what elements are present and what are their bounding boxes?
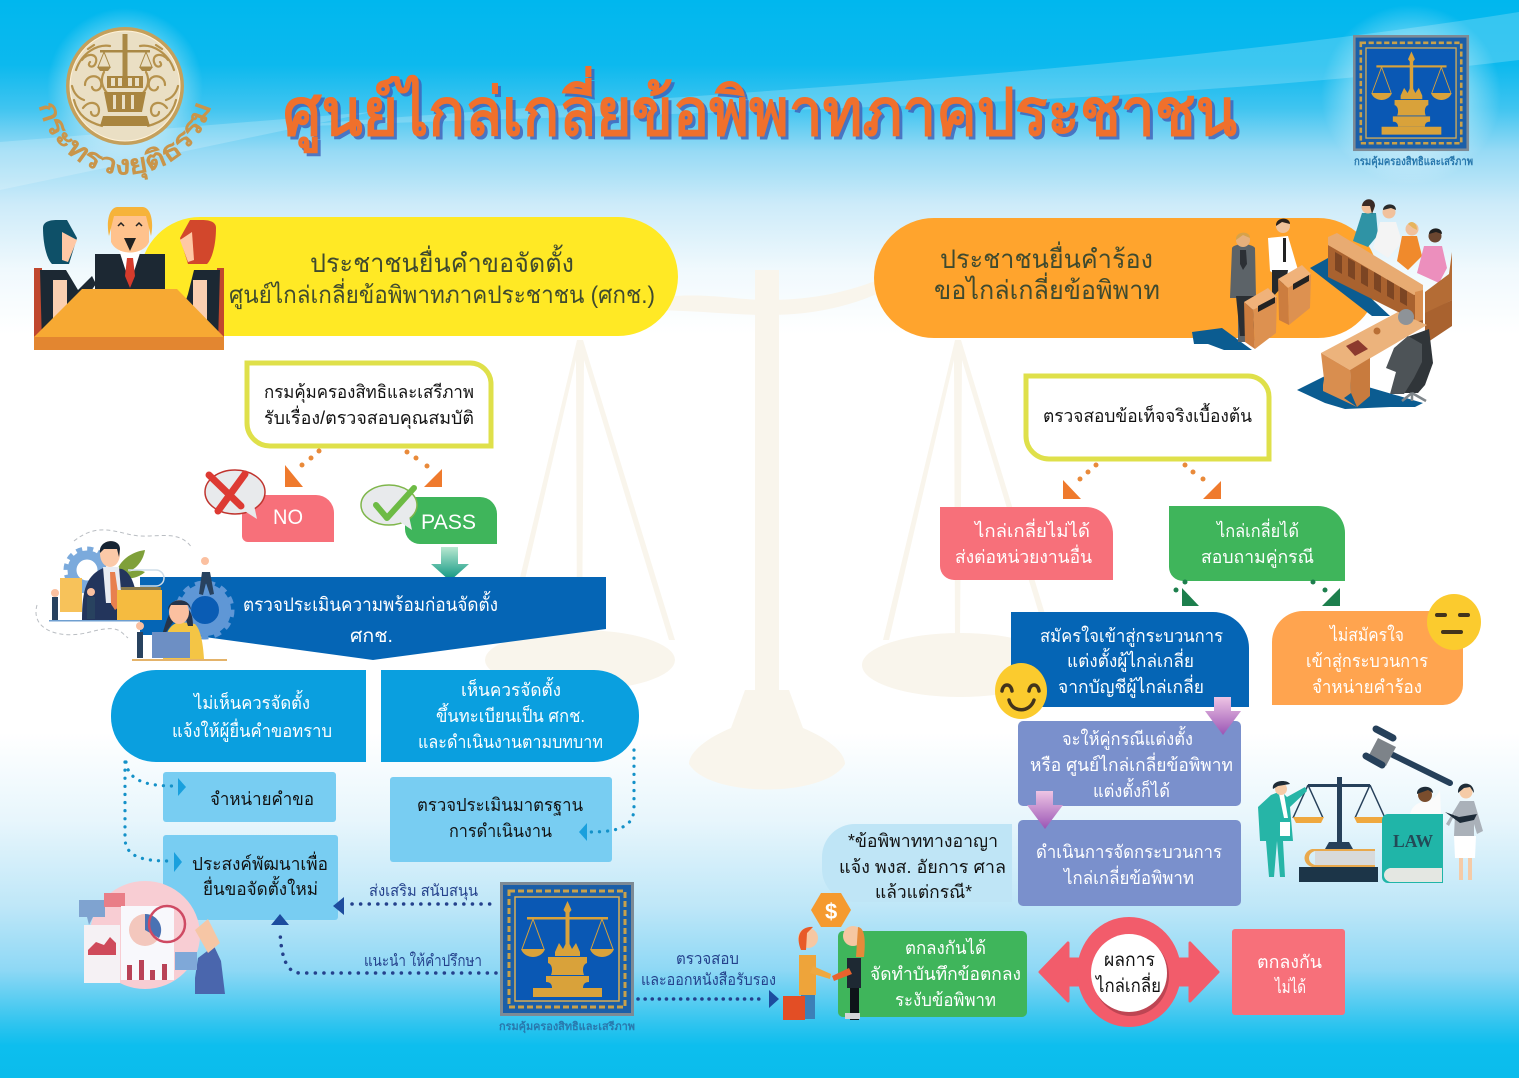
panel: orange heading: [874, 218, 1378, 338]
podiums: [1278, 265, 1311, 288]
arrow: advise and consult: [271, 914, 496, 973]
arrow: dotted links from left panel: [125, 762, 174, 861]
panel: appropriate to establish: และดำเนินงานตามบทบาท: [418, 732, 603, 752]
panel: PASS: PASS: [421, 511, 476, 534]
panel: yellow heading: [140, 217, 678, 336]
icon: handshake with dollar hexagon: $: [825, 899, 837, 924]
icon: data analysis report: [79, 881, 225, 994]
panel: orange heading: ขอไกล่เกลี่ยข้อพิพาท: [934, 272, 1160, 305]
lawyer left: [1230, 244, 1256, 342]
scales: [1308, 777, 1370, 845]
panel: agreement reached: ระงับข้อพิพาท: [895, 990, 996, 1010]
arrow: inspect and certify: ตรวจสอบ: [676, 951, 739, 968]
panel: wish to develop and reapply: ประสงค์พัฒนาเพื่อ: [192, 851, 328, 874]
icon: neutral face: [1427, 594, 1481, 650]
panel: parties or centre appoint: [1018, 721, 1241, 806]
middle person: [1410, 790, 1441, 814]
arrow: promote and support: ส่งเสริม สนับสนุน: [369, 883, 478, 901]
logo: department emblem, bottom: กรมคุ้มครองสิทธิและเสรีภาพ: [499, 1020, 635, 1034]
panel: voluntary process: แต่งตั้งผู้ไกล่เกลี่ย: [1067, 648, 1194, 672]
panel: readiness assessment banner: ตรวจประเมินความพร้อมก่อนจัดตั้ง: [243, 591, 498, 616]
panel: wish to develop and reapply: ยื่นขอจัดตั้งใหม่: [203, 876, 318, 899]
icon: law and justice group: LAW: [1393, 831, 1433, 851]
panel: can mediate: ไกล่เกลี่ยได้: [1215, 518, 1299, 541]
panel: orange heading: ประชาชนยื่นคำร้อง: [940, 241, 1153, 274]
panel: standards assessment: [390, 777, 612, 862]
icon: office workers with gears: [36, 530, 232, 661]
law book: [1382, 814, 1443, 883]
panel: cannot mediate: ไกล่เกลี่ยไม่ได้: [973, 518, 1090, 541]
judge's desk: [1321, 312, 1427, 370]
panel: can mediate: สอบถามคู่กรณี: [1201, 547, 1314, 568]
watermark: scales of justice: [485, 270, 1058, 790]
arrow: fact check to can mediate: [1182, 462, 1221, 499]
panel: not voluntary: จำหน่ายคำร้อง: [1312, 677, 1422, 697]
arrow: purple down to mediation: [1027, 791, 1063, 829]
stacked books: [1304, 849, 1375, 867]
curved ministry name: กระทรวงยุติธรรม: [38, 102, 211, 180]
jury members: [1353, 199, 1447, 283]
panel: mediation result hub: ผลการ: [1104, 950, 1155, 971]
arrow: inspect and certify: และออกหนังสือรับรอง: [641, 971, 776, 989]
gavel: [1393, 755, 1450, 783]
panel: yellow heading: ประชาชนยื่นคำขอจัดตั้ง: [310, 244, 574, 278]
panel: cannot mediate: [940, 507, 1113, 580]
arrow: can mediate to voluntary: [1174, 580, 1199, 606]
logo: Rights and Liberties Protection Department, top right: กรมคุ้มครองสิทธิและเสรีภาพ: [1354, 155, 1473, 169]
panel: criminal dispute note: [822, 824, 1012, 902]
icon: red cross speech bubble: [205, 470, 265, 519]
panel: agreement reached: ตกลงกันได้: [905, 937, 986, 958]
left man: [1258, 787, 1307, 877]
panel: standards assessment: ตรวจประเมินมาตรฐาน: [417, 795, 583, 816]
panel: PASS: [405, 497, 497, 544]
panel: criminal dispute note: แจ้ง พงส. อัยการ ศาล: [839, 857, 1006, 877]
panel: wish to develop and reapply: [163, 835, 338, 920]
panel: standards assessment: การดำเนินงาน: [449, 821, 552, 841]
panel: yellow heading: ศูนย์ไกล่เกลี่ยข้อพิพาทภาคประชาชน (ศกช.): [229, 278, 655, 310]
panel: parties or centre appoint: แต่งตั้งก็ได้: [1093, 778, 1170, 801]
panel: rights department review box: รับเรื่อง/ตรวจสอบคุณสมบัติ: [264, 405, 474, 429]
arrow: promote and support: [333, 883, 494, 915]
panel: not voluntary: [1272, 611, 1463, 705]
panel: not appropriate to establish: ไม่เห็นควรจัดตั้ง: [192, 690, 310, 713]
panel: NO: [242, 495, 334, 542]
panel: run mediation: [1018, 820, 1241, 906]
panel: parties or centre appoint: หรือ ศูนย์ไกล่เกลี่ยข้อพิพาท: [1030, 752, 1233, 776]
arrow: pass down to assessment: [431, 547, 469, 581]
panel: rights department review box: กรมคุ้มครองสิทธิและเสรีภาพ: [264, 382, 474, 403]
jury desk: [1328, 245, 1423, 324]
icon: law and justice group: [1258, 729, 1483, 883]
arrow: review to PASS: [404, 450, 442, 487]
blue floor patches: [1192, 258, 1423, 409]
logo: Ministry of Justice seal: [38, 10, 211, 180]
title: ศูนย์ไกล่เกลี่ยข้อพิพาทภาคประชาชน: [283, 65, 1237, 154]
icon: green check speech bubble: [361, 485, 417, 530]
panel: NO: NO: [273, 506, 303, 529]
logo: department emblem, bottom: [499, 882, 635, 1034]
panel: voluntary process: จากบัญชีผู้ไกล่เกลี่ย: [1058, 674, 1204, 698]
panel: no agreement: ไม่ได้: [1274, 976, 1306, 997]
panel: mediation result hub: [1040, 917, 1218, 1027]
arrow: purple down to appointment: [1205, 697, 1241, 735]
panel: readiness assessment banner: ศกช.: [350, 626, 393, 647]
panel: no agreement: [1232, 929, 1345, 1015]
panel: criminal dispute note: แล้วแต่กรณี*: [875, 882, 972, 902]
panel: initial fact check box: ตรวจสอบข้อเท็จจริงเบื้องต้น: [1043, 403, 1252, 426]
arrow: dotted link from right panel: [590, 750, 634, 832]
icon: courtroom scene: [1192, 199, 1452, 409]
arrow: inspect and certify: [638, 951, 779, 1008]
title: ศูนย์ไกล่เกลี่ยข้อพิพาทภาคประชาชน: [286, 68, 1240, 157]
panel: dismiss request: จำหน่ายคำขอ: [210, 789, 314, 809]
jury box bench end: [1425, 252, 1452, 314]
right woman: [1446, 801, 1483, 836]
panel: can mediate: [1169, 506, 1345, 581]
panel: agreement reached: [838, 931, 1027, 1017]
icon: handshake with dollar hexagon: [783, 893, 865, 1020]
panel: appropriate to establish: เห็นควรจัดตั้ง: [461, 677, 561, 700]
panel: cannot mediate: ส่งต่อหน่วยงานอื่น: [955, 544, 1092, 567]
panel: voluntary process: [1011, 612, 1249, 707]
panel: dismiss request: [163, 772, 336, 822]
judge: [1396, 329, 1433, 393]
panel: not appropriate to establish: [111, 670, 366, 762]
arrow: fact check to cannot mediate: [1063, 462, 1098, 499]
panel: mediation result hub: ไกล่เกลี่ย: [1094, 972, 1161, 997]
panel: initial fact check box: [1026, 376, 1269, 459]
lawyer right: [1268, 236, 1304, 281]
arrow: review to NO: [285, 448, 322, 487]
panel: no agreement: ตกลงกัน: [1257, 952, 1322, 972]
panel: not appropriate to establish: แจ้งให้ผู้ยื่นคำขอทราบ: [172, 718, 332, 742]
panel: criminal dispute note: *ข้อพิพาททางอาญา: [848, 831, 998, 851]
icon: three people at a meeting table: [34, 207, 224, 350]
arrow: advise and consult: แนะนำ ให้คำปรึกษา: [364, 951, 482, 970]
panel: readiness assessment banner: [140, 577, 606, 660]
logo: Rights and Liberties Protection Department, top right: [1321, 5, 1501, 185]
panel: not voluntary: ไม่สมัครใจ: [1328, 624, 1404, 645]
arrow: can mediate to not voluntary: [1310, 580, 1340, 606]
panel: voluntary process: สมัครใจเข้าสู่กระบวนการ: [1040, 625, 1223, 647]
panel: appropriate to establish: [381, 670, 639, 762]
panel: run mediation: ไกล่เกลี่ยข้อพิพาท: [1062, 865, 1194, 888]
panel: not voluntary: เข้าสู่กระบวนการ: [1306, 651, 1428, 672]
panel: rights department review box: [247, 363, 491, 446]
panel: agreement reached: จัดทำบันทึกข้อตกลง: [870, 964, 1021, 984]
panel: parties or centre appoint: จะให้คู่กรณีแต่งตั้ง: [1062, 726, 1193, 750]
panel: run mediation: ดำเนินการจัดกระบวนการ: [1036, 842, 1222, 862]
icon: smiling face: [995, 663, 1047, 719]
panel: appropriate to establish: ขึ้นทะเบียนเป็น ศกช.: [436, 703, 585, 726]
